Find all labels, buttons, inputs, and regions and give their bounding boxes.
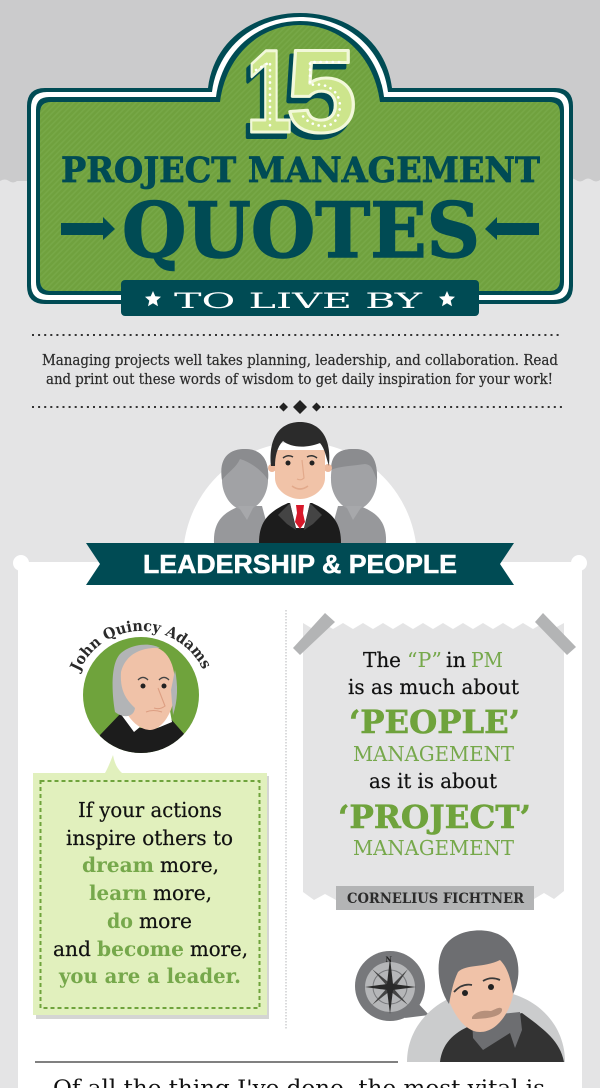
note quote text: ‘PROJECT’ — [338, 798, 531, 836]
quote text — [53, 798, 248, 988]
quote text: more, — [160, 853, 219, 877]
author label: cornelius fichtner: CORNELIUS FICHTNER — [347, 891, 524, 907]
number 15 — [242, 25, 357, 163]
quote text: dream — [82, 853, 154, 877]
quote text: more — [139, 909, 192, 933]
note quote text: The — [363, 648, 401, 672]
quote text: inspire others to — [66, 826, 233, 850]
section ribbon: LEADERSHIP & PEOPLE — [143, 551, 457, 579]
icon: compass speech bubble: N — [386, 955, 392, 964]
note quote text: MANAGEMENT — [353, 836, 514, 860]
illustration: leader with team — [184, 422, 416, 543]
dotted divider with diamonds — [32, 400, 566, 414]
quote text: and — [53, 937, 91, 961]
quote card: john quincy adams — [33, 755, 269, 1019]
figure: left team member — [214, 449, 272, 543]
author label: cornelius fichtner — [336, 886, 534, 910]
number 15: 5 — [282, 31, 353, 163]
number 15: 1 — [246, 25, 292, 157]
banner: to live by: TO LIVE BY — [174, 289, 424, 313]
intro text — [42, 353, 558, 388]
tape: left — [293, 613, 335, 655]
note quote text: is as much about — [348, 675, 520, 699]
note quote text: PM — [471, 648, 503, 672]
quote text: more, — [190, 937, 248, 961]
note quote text: as it is about — [369, 769, 498, 793]
note quote text — [338, 648, 531, 860]
rule above next quote — [35, 1061, 398, 1063]
tape: right — [535, 613, 576, 655]
dotted column divider — [285, 610, 287, 1030]
intro text: and print out these words of wisdom to get daily inspiration for your work! — [46, 372, 553, 388]
heading: project management: PROJECT MANAGEMENT — [61, 150, 540, 191]
note card: the p in pm — [293, 613, 576, 910]
intro text: Managing projects well takes planning, leadership, and collaboration. Read — [42, 353, 558, 369]
note quote text: ‘PEOPLE’ — [349, 703, 520, 741]
heading: quotes: QUOTES — [122, 186, 480, 275]
title badge — [27, 13, 573, 316]
author name: john quincy adams: John Quincy Adams — [69, 620, 210, 674]
panel: leadership and people — [13, 555, 587, 1088]
note quote text: “P” — [407, 648, 442, 672]
icon: compass speech bubble — [355, 951, 429, 1021]
note quote text: in — [446, 648, 466, 672]
quote text: learn — [89, 881, 147, 905]
arrow: left — [61, 217, 115, 240]
number 15: 1 — [242, 30, 288, 162]
banner: to live by — [121, 280, 479, 316]
quote text: do — [107, 909, 133, 933]
arrow: right — [485, 217, 539, 240]
figure: right team member — [328, 449, 386, 543]
number 15: 5 — [286, 26, 357, 158]
quote text: If your actions — [78, 798, 222, 822]
quote text: you are a leader. — [58, 964, 241, 988]
illustration: cornelius fichtner — [407, 930, 565, 1062]
note quote text: MANAGEMENT — [353, 742, 514, 766]
portrait: john quincy adams — [83, 637, 199, 760]
quote text: become — [97, 937, 184, 961]
section ribbon — [86, 543, 514, 585]
figure: central leader — [259, 422, 341, 543]
quote text: more, — [153, 881, 212, 905]
dotted divider: top — [32, 334, 561, 336]
